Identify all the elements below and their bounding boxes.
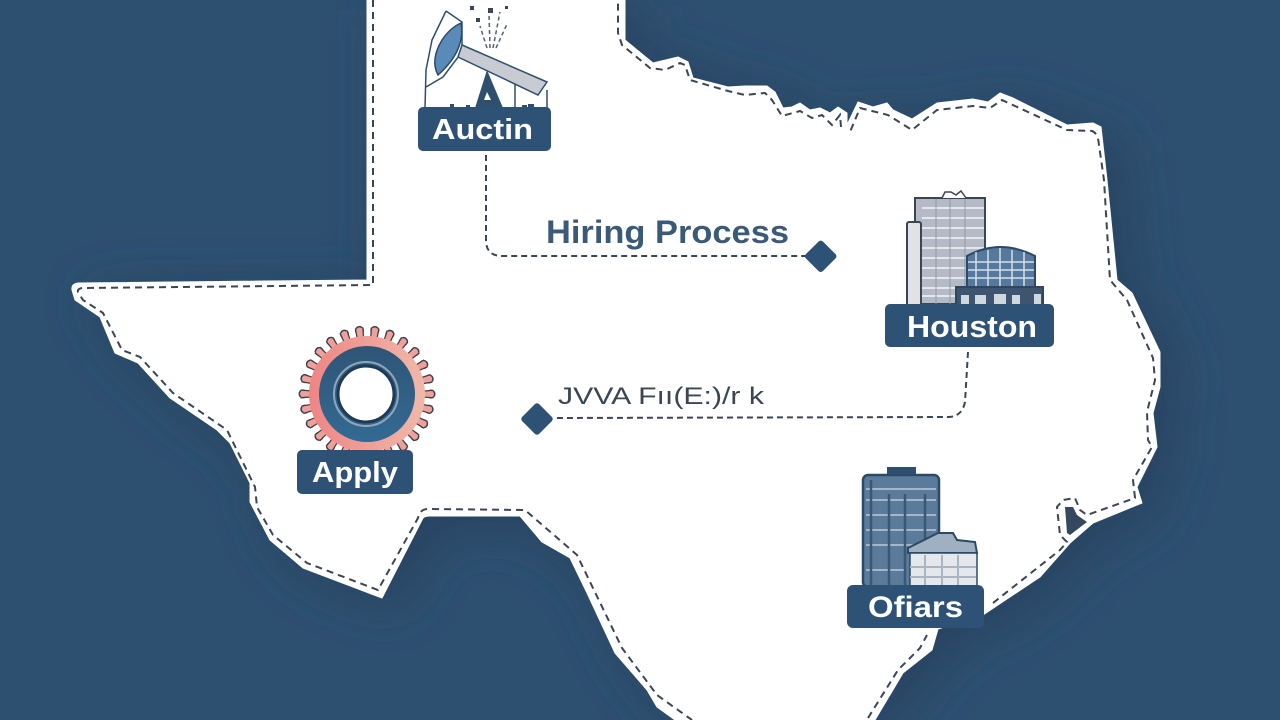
connector: Houston to middle marker — [556, 352, 968, 418]
label: Apply — [297, 450, 413, 494]
icon: Houston buildings — [907, 191, 1043, 306]
label: Houston: Houston — [907, 309, 1037, 344]
oil spray — [480, 12, 507, 48]
label: Apply: Apply — [312, 457, 398, 489]
pump beam — [458, 45, 547, 95]
skyline bumps — [450, 104, 534, 108]
garbled caption: JVVA Fıı(E:)/r k — [558, 383, 765, 410]
icon: oil pump jack — [425, 6, 547, 108]
posts — [515, 84, 547, 108]
label: Offers — [847, 585, 984, 628]
diamond marker: middle — [520, 402, 554, 436]
label: Austin — [418, 107, 551, 151]
connector: Austin to Hiring Process — [486, 155, 806, 256]
pump head — [425, 11, 462, 108]
heading: Hiring Process: Hiring Process — [546, 214, 789, 250]
icon: gear — [303, 330, 431, 458]
diamond marker: top — [804, 239, 838, 273]
derrick — [475, 70, 503, 108]
label: Houston — [885, 304, 1054, 347]
label: Offers: Ofiars — [868, 591, 963, 624]
icon: office buildings — [863, 467, 977, 587]
bay inlet — [1065, 507, 1087, 535]
label: Austin: Auctin — [432, 114, 533, 146]
